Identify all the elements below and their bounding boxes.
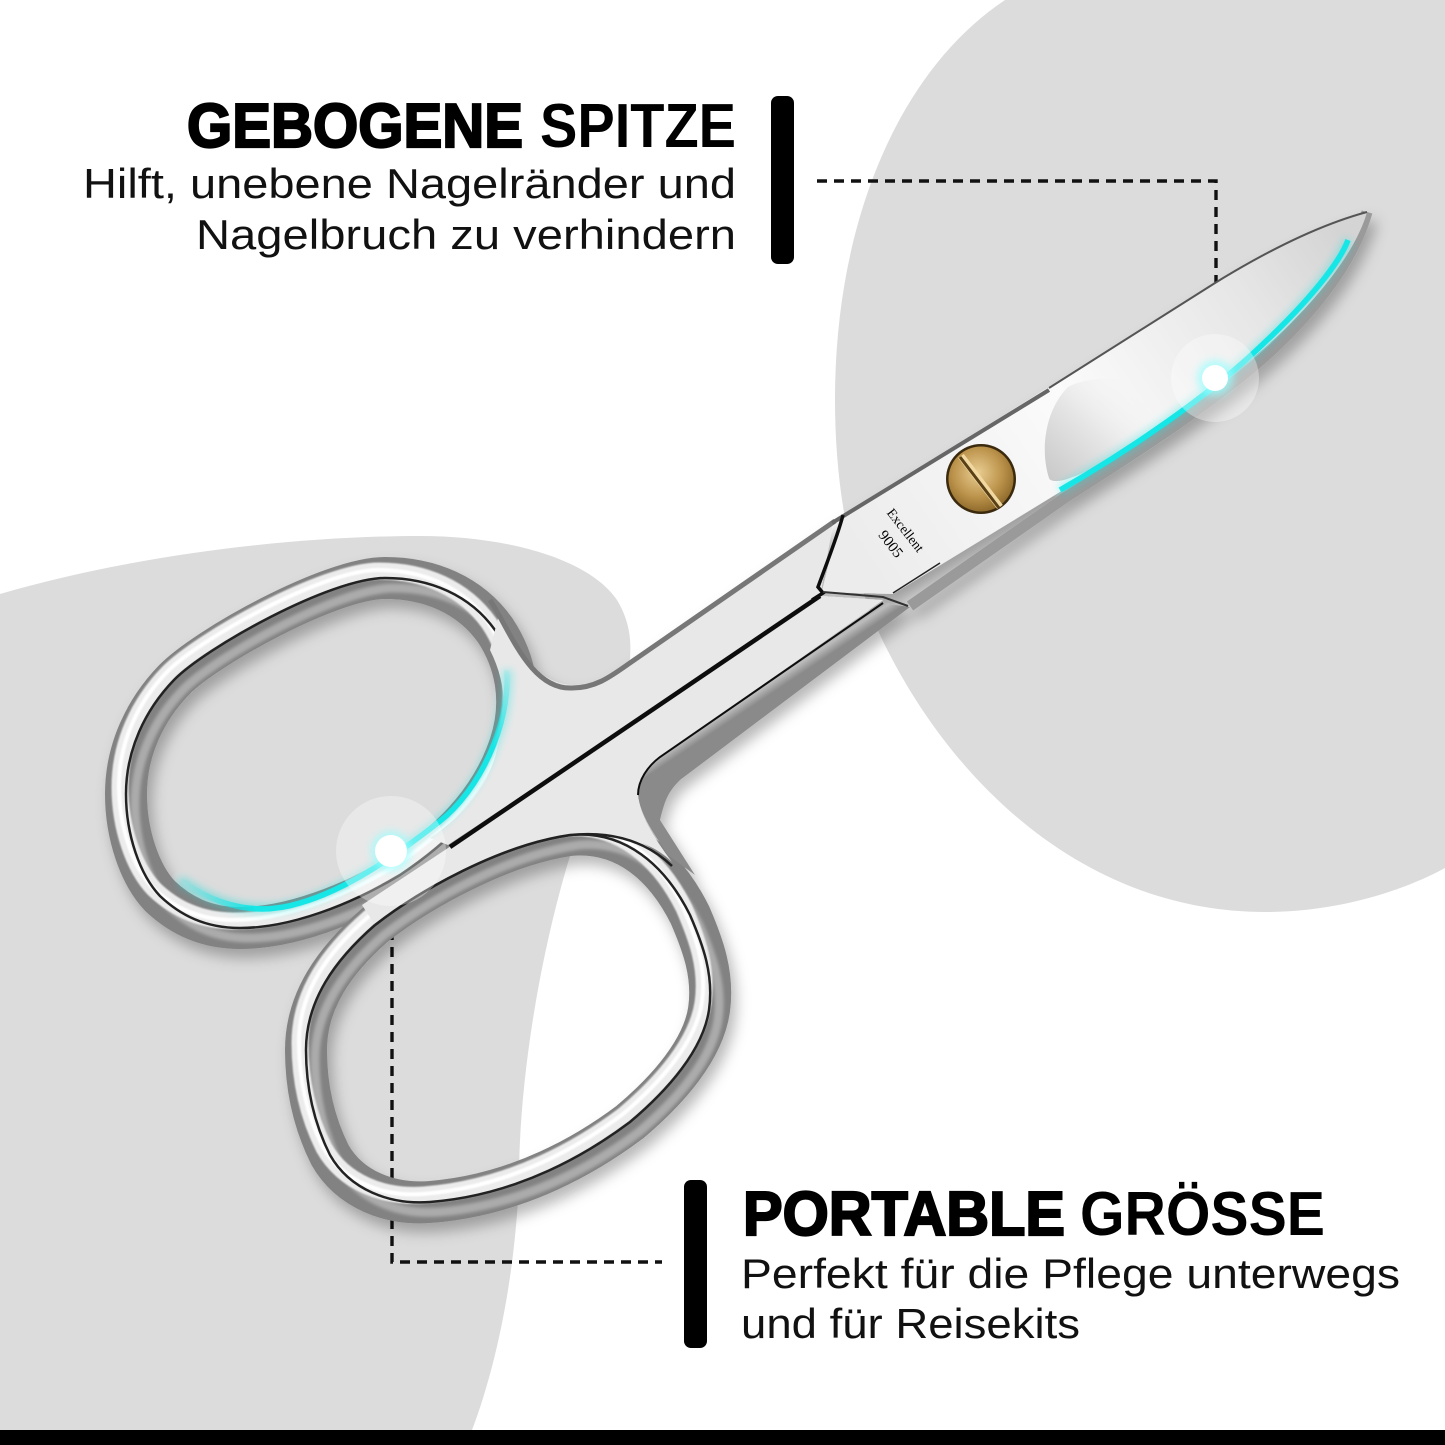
blade face [822, 212, 1367, 594]
lower finger ring [299, 827, 719, 1212]
heading: portable groesse [743, 1180, 1325, 1249]
blade hollow ground area [1045, 379, 1180, 481]
body text: tip: Nagelbruch zu verhindern [196, 211, 736, 258]
callout: portable groesse [684, 1180, 1400, 1348]
background blob: top right [835, 0, 1445, 912]
engraving on blade: Excellent [884, 506, 927, 555]
callout bar: tip [771, 96, 794, 264]
body text: tip: Hilft, unebene Nagelränder und [83, 160, 736, 207]
callout bar: size [684, 1180, 707, 1348]
upper finger ring [119, 570, 526, 938]
heading: gebogene spitze: SPITZE [540, 92, 736, 161]
heading: gebogene spitze [187, 92, 736, 161]
heading: portable groesse: GRÖSSE [1080, 1180, 1325, 1249]
upper handle [430, 521, 835, 845]
blade back bevel [910, 212, 1367, 606]
body text: size [741, 1250, 1400, 1347]
blade seam [450, 515, 940, 847]
engraving on blade: 9005 [875, 528, 906, 561]
body text: size: und für Reisekits [741, 1300, 1080, 1347]
bottom black strip [0, 1430, 1445, 1445]
heading: portable groesse: PORTABLE [743, 1180, 1065, 1249]
cyan highlight: upper ring [180, 670, 507, 909]
highlight dot: ring [336, 796, 446, 906]
body text: size: Perfekt für die Pflege unterwegs [741, 1250, 1400, 1297]
highlight dot: blade [1171, 334, 1259, 422]
blade top edge: tip [1049, 212, 1367, 388]
illustration: nail scissors [119, 212, 1367, 1212]
gold screw [946, 444, 1016, 514]
callout: gebogene spitze [83, 92, 794, 264]
dashed connector: tip callout [817, 181, 1216, 284]
body text: tip [83, 160, 736, 258]
dashed connector: size callout [392, 930, 662, 1262]
lower handle [362, 596, 910, 925]
heading: gebogene spitze: GEBOGENE [187, 92, 523, 161]
cyan highlight: blade edge [1060, 240, 1348, 490]
blade top edge [832, 390, 1049, 523]
background blob: bottom left [0, 536, 630, 1430]
